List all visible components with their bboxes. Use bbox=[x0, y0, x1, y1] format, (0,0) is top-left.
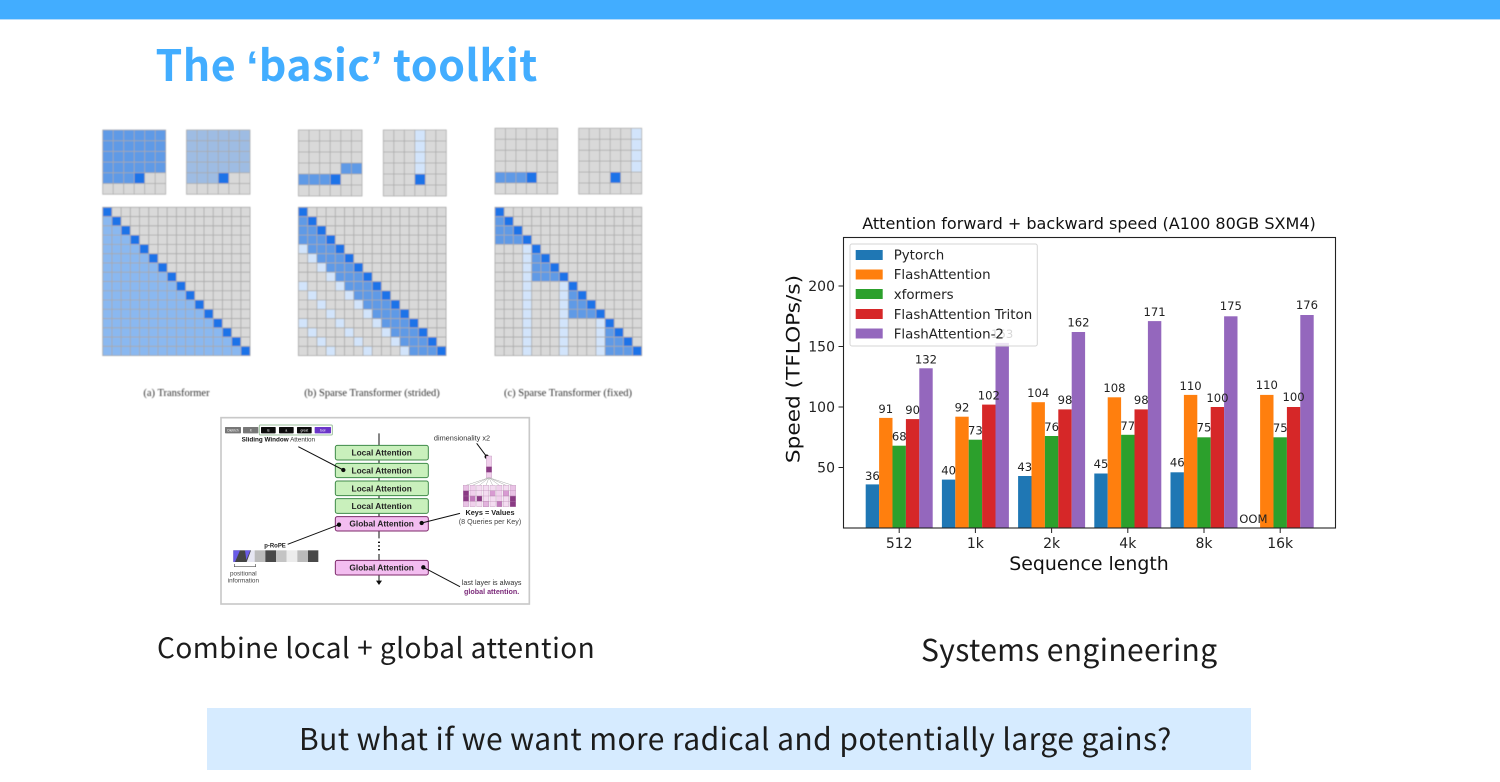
bracket bbox=[234, 564, 256, 567]
data labels: 43 bbox=[1017, 460, 1032, 474]
small grid: transformer 1 bbox=[103, 130, 166, 194]
small grid: strided 2 bbox=[383, 130, 446, 196]
label: sliding window: Sliding Window Attention bbox=[242, 437, 316, 444]
legend: FlashAttention Triton bbox=[894, 308, 1032, 323]
data labels: 75 bbox=[1273, 421, 1288, 435]
data labels bbox=[865, 298, 1318, 526]
label: positional information: positional bbox=[230, 571, 257, 578]
stack of attention blocks: Global Attention bbox=[349, 563, 414, 573]
stack of attention blocks: Local Attention bbox=[352, 465, 412, 475]
data labels: 176 bbox=[1296, 298, 1318, 312]
y tick labels: 150 bbox=[808, 340, 835, 356]
data labels: 104 bbox=[1027, 386, 1049, 400]
data labels: 40 bbox=[941, 464, 956, 478]
token row: is bbox=[267, 429, 270, 433]
x tick labels bbox=[886, 536, 1294, 552]
x tick labels: 4k bbox=[1119, 536, 1137, 552]
token row: it bbox=[250, 429, 252, 433]
x tick labels: 2k bbox=[1043, 536, 1061, 552]
small grid: strided 1 bbox=[298, 130, 362, 196]
large grid: fixed bbox=[495, 207, 642, 356]
series: FlashAttention Triton bbox=[906, 405, 1300, 528]
data labels: 100 bbox=[1283, 390, 1305, 404]
stack of attention blocks: Local Attention bbox=[352, 448, 412, 458]
data labels: 46 bbox=[1170, 456, 1185, 470]
data labels: 98 bbox=[1134, 393, 1149, 407]
data labels: 36 bbox=[865, 469, 880, 483]
data labels: 98 bbox=[1058, 393, 1072, 407]
data labels: 108 bbox=[1103, 381, 1125, 395]
y tick labels: 50 bbox=[817, 460, 835, 476]
token row: Dietrich bbox=[227, 429, 239, 433]
large grid: strided bbox=[298, 207, 446, 356]
positional embedding bar bbox=[233, 550, 318, 562]
label: keys = values: Keys = Values bbox=[465, 508, 515, 517]
legend bbox=[850, 244, 1037, 346]
data labels: 162 bbox=[1067, 316, 1089, 330]
data labels: 153 bbox=[991, 327, 1013, 341]
data labels: 132 bbox=[915, 352, 937, 366]
x tick labels: 8k bbox=[1195, 536, 1213, 552]
x tick labels: 16k bbox=[1267, 536, 1294, 552]
series: FlashAttention bbox=[879, 395, 1274, 528]
x tick labels: 1k bbox=[967, 536, 985, 552]
token row: a bbox=[285, 429, 287, 433]
label: last layer: last layer is always bbox=[462, 579, 522, 587]
bar chart: attention speed bbox=[782, 214, 1336, 575]
small grid: transformer 2 bbox=[186, 130, 250, 194]
label: positional information: information bbox=[228, 578, 259, 585]
caption: transformer: (a) Transformer bbox=[143, 388, 210, 399]
stack of attention blocks: Global Attention bbox=[349, 519, 414, 529]
label: dimensionality: dimensionality x2 bbox=[434, 433, 490, 442]
title: The ‘basic’ toolkit bbox=[156, 32, 538, 94]
label: p-RoPE: p-RoPE bbox=[264, 543, 286, 549]
label: queries per key: (8 Queries per Key) bbox=[459, 518, 521, 526]
central connector line bbox=[377, 433, 380, 582]
stack of attention blocks: Local Attention bbox=[352, 483, 412, 493]
x axis title: Sequence length bbox=[1009, 553, 1169, 575]
pointer lines bbox=[288, 443, 488, 587]
token row bbox=[225, 425, 332, 435]
arrow head bbox=[376, 581, 382, 585]
panel: sparse transformer strided grids bbox=[298, 130, 446, 399]
y axis title: Speed (TFLOPs/s) bbox=[782, 275, 804, 463]
data labels: 175 bbox=[1220, 299, 1242, 313]
large grid: transformer bbox=[103, 207, 250, 356]
series: FlashAttention-2 bbox=[919, 315, 1314, 528]
chart title: Attention forward + backward speed (A100 80GB SXM4) bbox=[862, 214, 1316, 233]
label: global attention: global attention. bbox=[464, 588, 519, 596]
callout bbox=[207, 708, 1251, 770]
data labels: 90 bbox=[905, 403, 920, 417]
token row: great bbox=[301, 429, 308, 433]
panel: local + global attention diagram bbox=[221, 418, 529, 604]
data labels: 73 bbox=[968, 424, 983, 438]
panel: sparse transformer fixed grids bbox=[495, 128, 642, 399]
data labels: 76 bbox=[1044, 420, 1059, 434]
legend: FlashAttention-2 bbox=[894, 328, 1004, 342]
data labels: 91 bbox=[878, 402, 893, 416]
y tick labels: 200 bbox=[808, 279, 835, 295]
legend: Pytorch bbox=[894, 248, 944, 264]
series: xformers bbox=[892, 435, 1287, 528]
legend: xformers bbox=[894, 288, 954, 303]
series: Pytorch bbox=[866, 472, 1184, 528]
caption: strided: (b) Sparse Transformer (strided) bbox=[304, 388, 440, 399]
data labels: 75 bbox=[1197, 420, 1211, 434]
small grid: fixed 2 bbox=[579, 128, 642, 194]
small grid: fixed 1 bbox=[495, 128, 558, 194]
axis ticks bbox=[838, 286, 1280, 533]
y tick labels bbox=[808, 279, 835, 476]
header bar bbox=[0, 0, 1500, 20]
keys and values matrix bbox=[463, 485, 516, 507]
caption: combine local + global attention: Combine local + global attention bbox=[157, 627, 595, 667]
data labels: 100 bbox=[1206, 391, 1228, 405]
token row: tool bbox=[320, 429, 326, 433]
callout text: But what if we want more radical and potentially large gains? bbox=[299, 715, 1172, 759]
stack of attention blocks: Local Attention bbox=[352, 501, 412, 511]
x tick labels: 512 bbox=[886, 536, 913, 552]
data labels: 68 bbox=[892, 430, 907, 444]
query stack bbox=[466, 456, 513, 485]
vertical dots bbox=[376, 542, 382, 550]
caption: fixed: (c) Sparse Transformer (fixed) bbox=[504, 388, 633, 399]
stack of attention blocks bbox=[335, 445, 428, 575]
data labels: 45 bbox=[1094, 457, 1108, 471]
data labels: 171 bbox=[1144, 305, 1166, 319]
panel: transformer attention grids bbox=[103, 130, 250, 399]
data labels: 92 bbox=[955, 400, 969, 414]
data labels: 110 bbox=[1180, 379, 1202, 393]
y tick labels: 100 bbox=[808, 400, 835, 416]
data labels: 102 bbox=[978, 388, 1000, 402]
caption: systems engineering: Systems engineering bbox=[921, 626, 1218, 670]
legend: FlashAttention bbox=[894, 268, 991, 283]
data labels: 77 bbox=[1120, 419, 1135, 433]
data labels: 110 bbox=[1256, 378, 1278, 392]
chart axes frame bbox=[844, 238, 1336, 528]
data labels: OOM bbox=[1239, 512, 1268, 526]
